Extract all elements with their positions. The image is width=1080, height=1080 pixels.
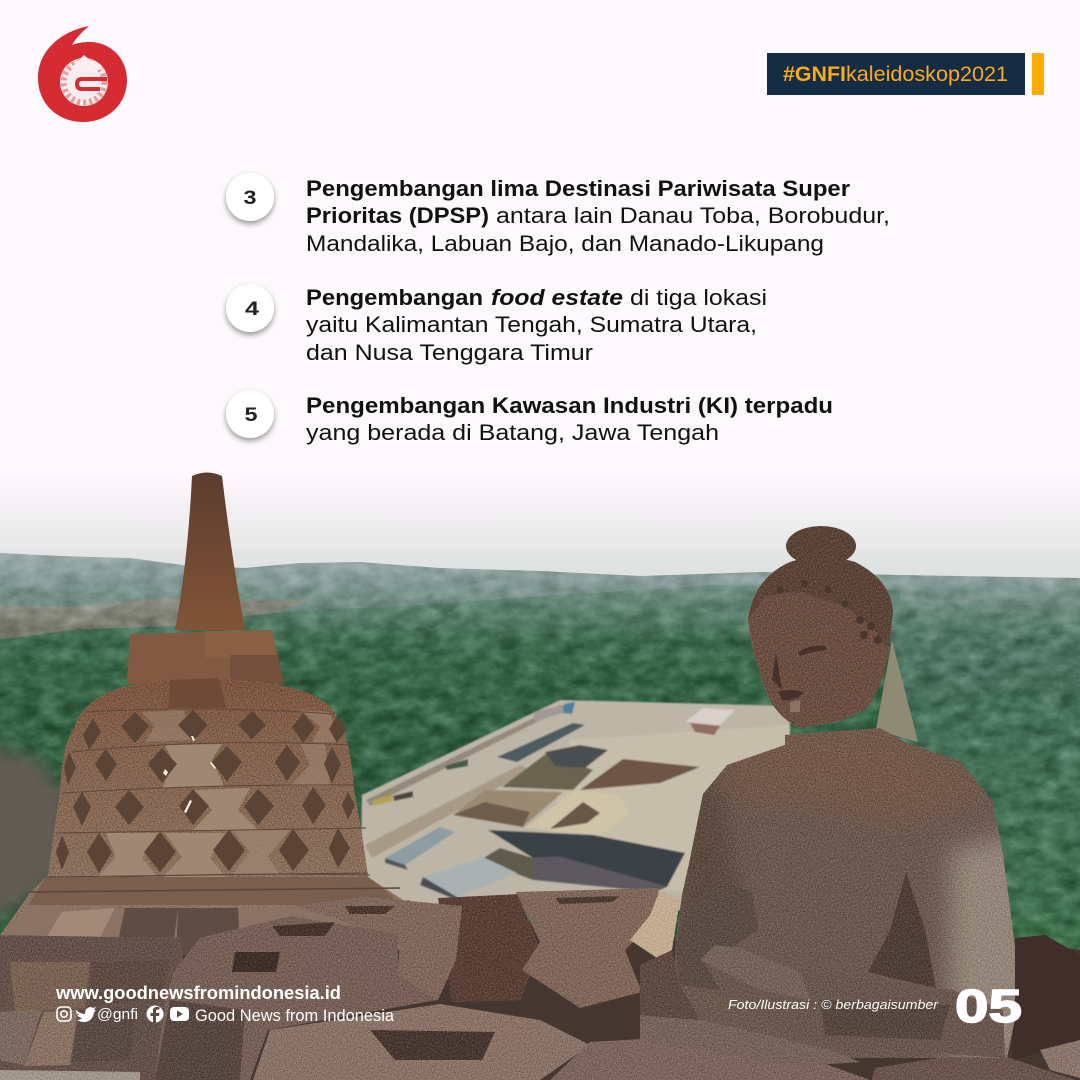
dark long roof bbox=[497, 723, 585, 762]
plots bbox=[502, 753, 593, 790]
item 3 text: Prioritas (DPSP) bbox=[306, 203, 489, 228]
logo eagle head bbox=[72, 55, 104, 72]
stupa spire bbox=[175, 472, 245, 630]
right bottom stones bbox=[872, 1057, 1075, 1080]
list item 5 bbox=[226, 390, 833, 445]
list item 3 bbox=[226, 173, 890, 256]
item 5 text bbox=[306, 393, 833, 445]
lap stone bbox=[550, 1038, 870, 1080]
number badge 4: 4 bbox=[245, 299, 260, 320]
stupa steps bbox=[0, 873, 410, 955]
item 3 text: antara lain Danau Toba, Borobudur, bbox=[496, 203, 890, 228]
icon: youtube bbox=[170, 1007, 189, 1021]
item 5 text: yang berada di Batang, Jawa Tengah bbox=[306, 420, 719, 445]
footer website and social media: www.goodnewsfromindonesia.id bbox=[55, 983, 341, 1003]
grey roofs bbox=[385, 827, 455, 865]
forearm bbox=[700, 957, 1005, 1058]
dark middle block bbox=[438, 894, 540, 1002]
shadow under arm bbox=[868, 872, 936, 988]
stupa band lines bbox=[46, 709, 370, 880]
front block with recess bbox=[253, 1004, 590, 1080]
logo bbox=[38, 26, 127, 122]
item 3 text bbox=[306, 176, 890, 256]
road behind statue bbox=[876, 640, 918, 742]
icon: facebook bbox=[146, 1006, 164, 1023]
icon: instagram bbox=[57, 1007, 71, 1021]
item 5 text: Pengembangan Kawasan Industri (KI) terpadu bbox=[306, 393, 833, 418]
white canopy bbox=[685, 708, 735, 725]
number badge 3: 3 bbox=[244, 188, 256, 209]
ushnisha bbox=[786, 526, 856, 566]
stupa dome bbox=[0, 679, 410, 935]
face bbox=[772, 646, 826, 700]
dark roof main hall bbox=[488, 830, 685, 887]
hashtag banner: kaleidoskop2021 bbox=[846, 63, 1008, 86]
item 4 text bbox=[306, 285, 767, 365]
item 4 text: dan Nusa Tenggara Timur bbox=[306, 340, 593, 365]
foreground stone base mass bbox=[0, 900, 1080, 1080]
item 3 text: Mandalika, Labuan Bajo, dan Manado-Likupang bbox=[306, 231, 824, 256]
torso and arms bbox=[670, 526, 1030, 1060]
hourglass block bbox=[516, 888, 660, 1008]
list item 4 bbox=[226, 284, 767, 365]
page number: 05 bbox=[955, 980, 1022, 1032]
item 3 text: Pengembangan lima Destinasi Pariwisata Super bbox=[306, 176, 850, 201]
industrial estate site bbox=[360, 700, 790, 910]
logo mark red swirl bbox=[38, 26, 127, 122]
number badge 5: 5 bbox=[244, 405, 258, 426]
facebook and youtube name: Good News from Indonesia bbox=[195, 1007, 395, 1025]
number badge 5 bbox=[226, 390, 274, 438]
stupa square base bbox=[127, 630, 284, 684]
photo credit: Foto/Ilustrasi : © berbagaisumber bbox=[728, 997, 939, 1012]
latticed diamonds bbox=[56, 710, 355, 873]
icon: twitter bbox=[76, 1007, 96, 1022]
foreground stone blocks bbox=[155, 888, 1080, 1080]
number badge 3 bbox=[226, 173, 274, 221]
logo emblem wreath bbox=[60, 58, 108, 106]
hair curls bbox=[776, 580, 882, 644]
item 4 text: Pengembangan bbox=[306, 285, 483, 310]
footer website and social media bbox=[55, 983, 395, 1025]
hand bbox=[675, 878, 758, 990]
foreground masonry left bbox=[0, 935, 200, 1080]
dark stone behind bbox=[1012, 935, 1080, 1060]
hashtag banner bbox=[767, 53, 1044, 95]
landscape photo background bbox=[0, 470, 1080, 1000]
item 4 text: food estate bbox=[491, 285, 623, 310]
stepped block bbox=[293, 897, 462, 1000]
item 4 text: di tiga lokasi bbox=[630, 285, 767, 310]
parked trucks bbox=[445, 759, 468, 770]
head bbox=[748, 557, 893, 728]
large block bbox=[155, 916, 437, 1080]
twitter handle: @gnfi bbox=[97, 1006, 138, 1023]
Buddha statue bbox=[670, 526, 1080, 1060]
hashtag banner: #GNFI bbox=[783, 63, 846, 86]
lit hourglass blocks bbox=[95, 710, 340, 880]
stupa bbox=[0, 472, 410, 955]
item 4 text: yaitu Kalimantan Tengah, Sumatra Utara, bbox=[306, 312, 757, 337]
light slits bbox=[163, 736, 216, 813]
logo G mark bbox=[77, 79, 107, 89]
number badge 4 bbox=[226, 284, 274, 332]
